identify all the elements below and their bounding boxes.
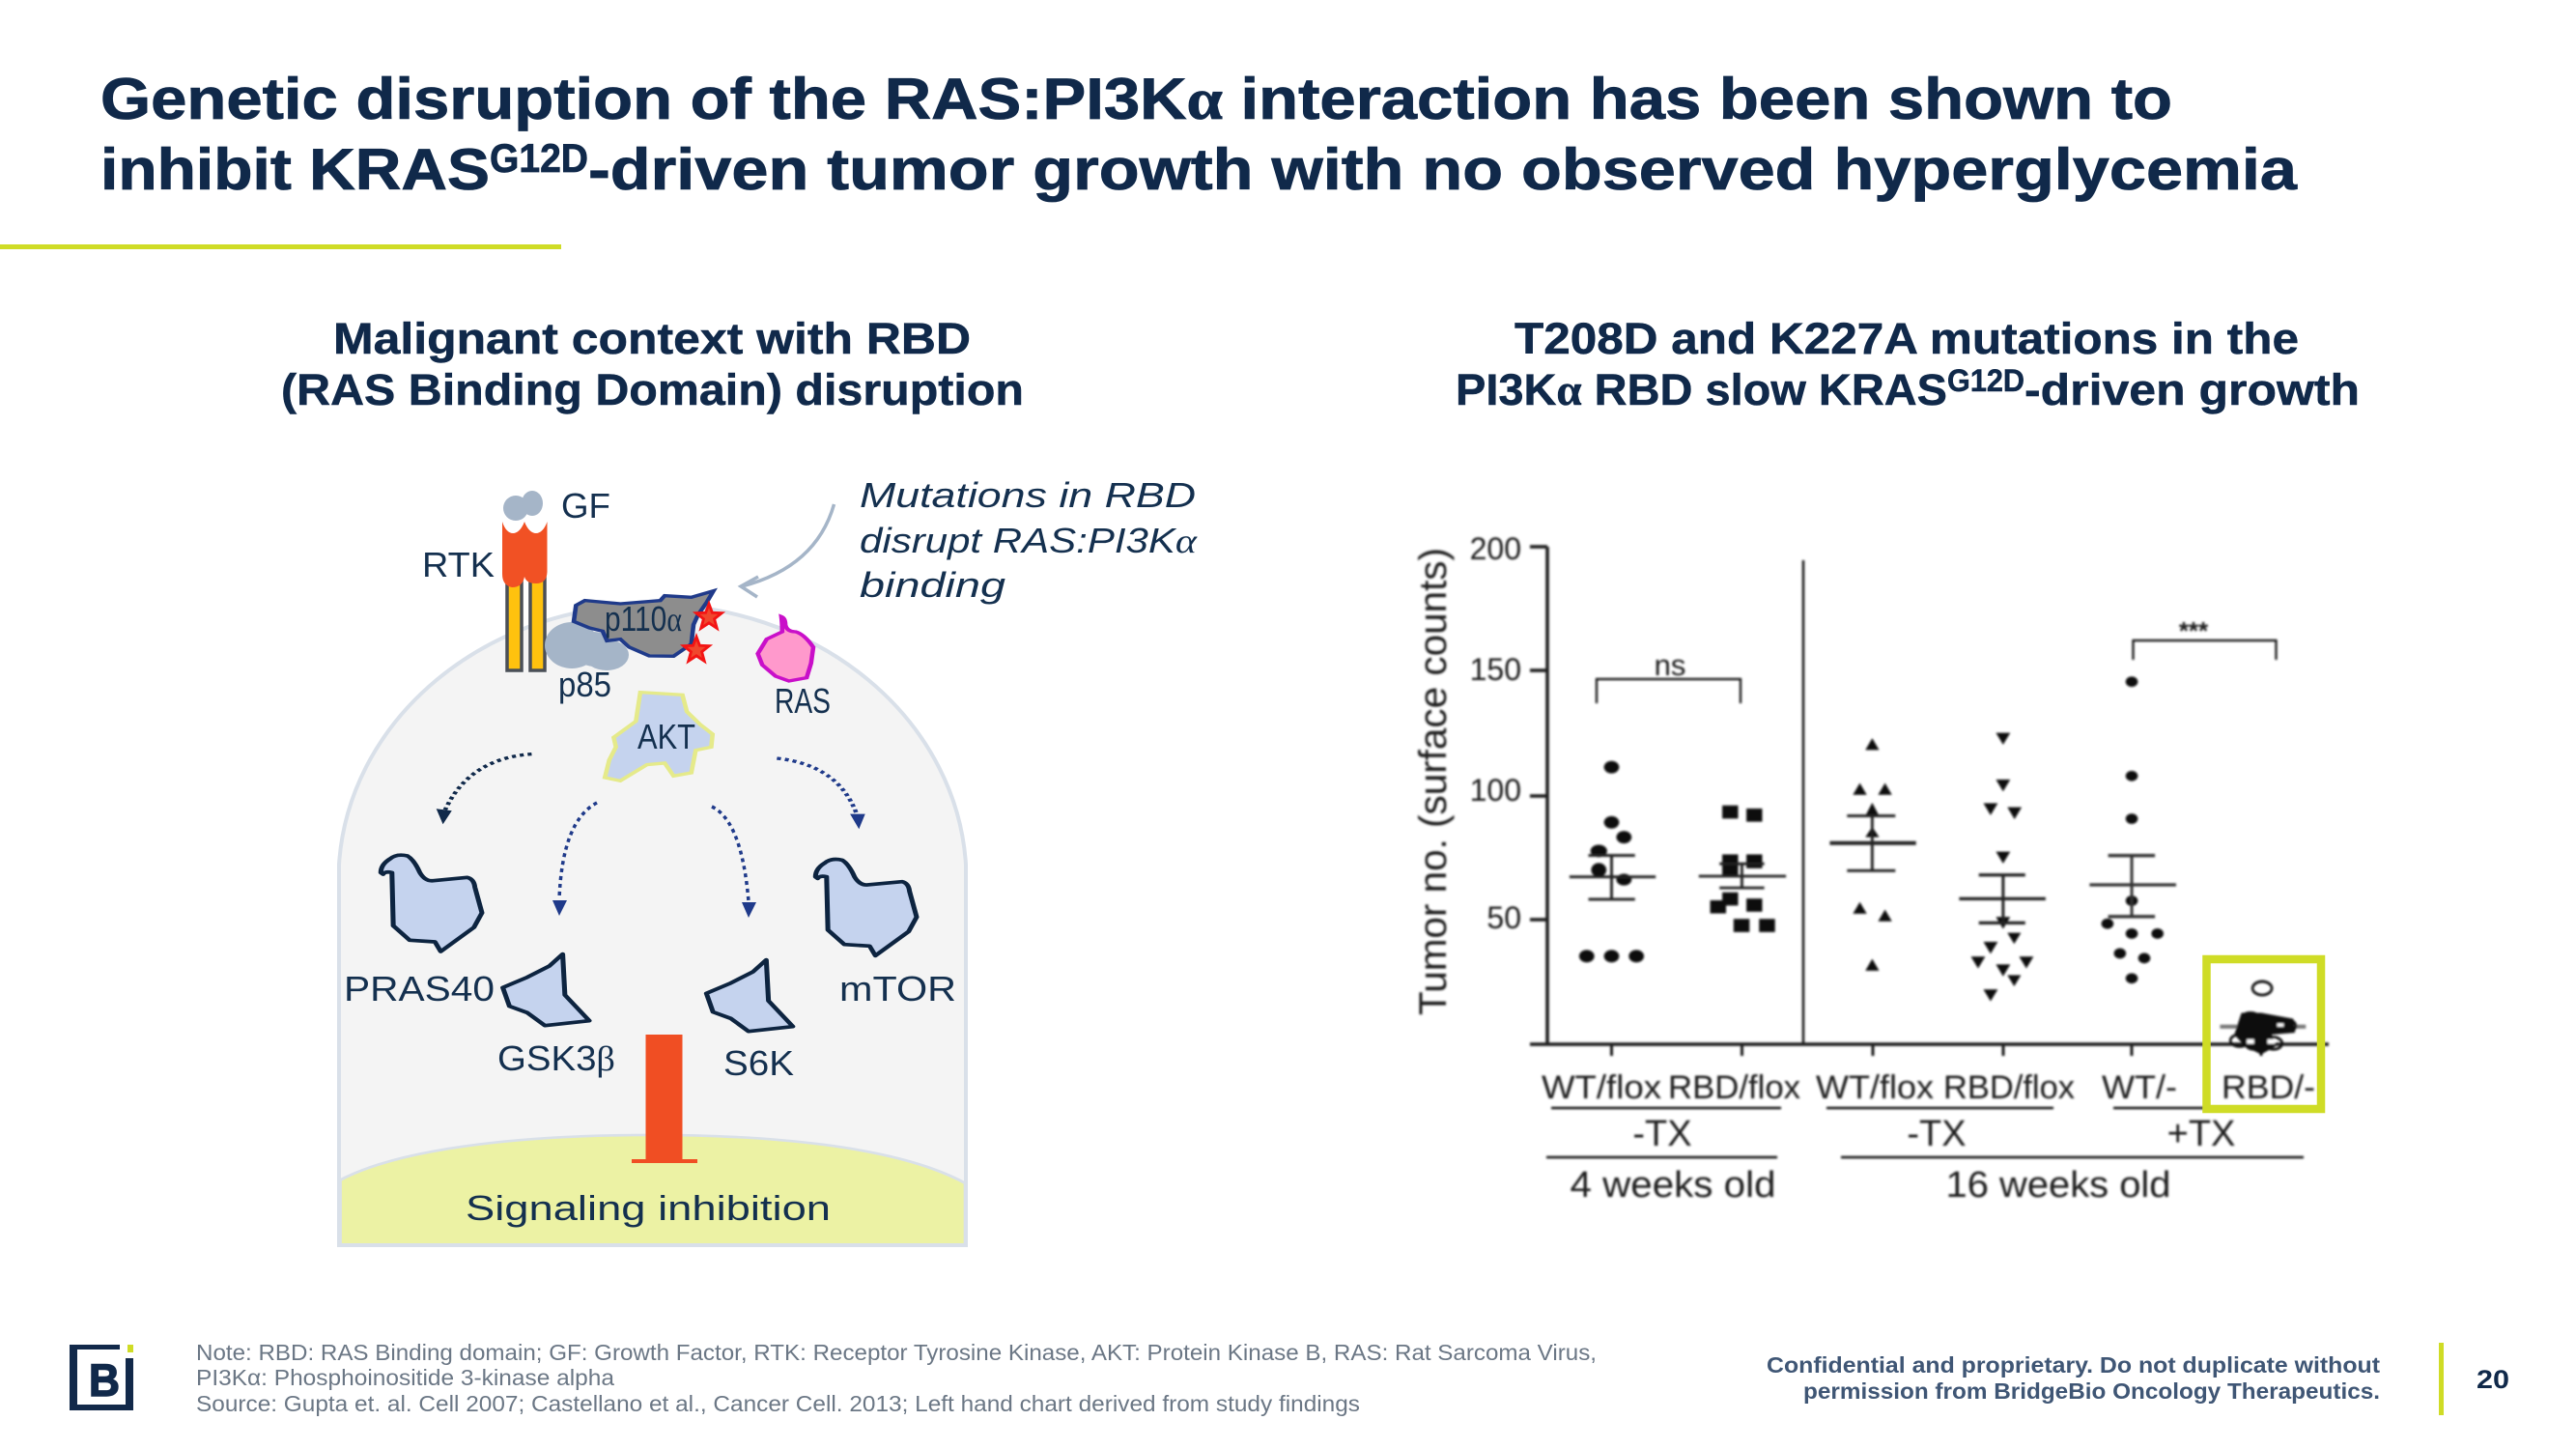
footer logo xyxy=(70,1345,133,1410)
y axis tick labels: 50 xyxy=(1486,900,1521,935)
diagram labels: Signaling inhibition xyxy=(466,1188,831,1228)
x axis treatment and age labels: 16 weeks old xyxy=(1945,1165,2171,1206)
title: Genetic disruption of the RAS:PI3K α interaction has been shown to xyxy=(100,67,2172,131)
x axis treatment and age labels xyxy=(1571,1114,2235,1206)
y axis title: Tumor no. (surface counts) xyxy=(1412,548,1455,1015)
footnote: PI3Kα: Phosphoinositide 3-kinase alpha xyxy=(196,1365,614,1390)
footer logo: B xyxy=(89,1354,120,1406)
diagram labels: GF xyxy=(561,486,610,526)
footnote: Source: Gupta et. al. Cell 2007; Castellano et al., Cancer Cell. 2013; Left hand chart derived from study findings xyxy=(196,1391,1360,1416)
icon: receptor tyrosine kinase xyxy=(502,522,547,670)
diagram labels xyxy=(344,486,956,1228)
icon: PRAS40 xyxy=(381,855,482,952)
icon: growth factor xyxy=(503,491,543,521)
x axis treatment and age labels: 4 weeks old xyxy=(1571,1165,1775,1206)
icon: p85 xyxy=(545,622,629,670)
icon: S6K xyxy=(706,960,793,1032)
highlight box: RBD/- xyxy=(2206,959,2321,1109)
diagram labels: PRAS40 xyxy=(344,969,495,1009)
bracket: significance: *** xyxy=(2179,616,2209,645)
heading: left panel xyxy=(281,314,1024,414)
footnote xyxy=(196,1340,1597,1416)
bracket: ns xyxy=(1597,648,1741,703)
bracket: significance xyxy=(2133,616,2276,660)
icon: p110 alpha xyxy=(574,591,714,656)
heading: right panel: G12D xyxy=(1947,363,2024,398)
heading: right panel: T208D and K227A mutations in the xyxy=(1514,314,2299,363)
title: inhibit KRAS xyxy=(100,137,490,202)
x axis group labels: WT/flox xyxy=(1816,1069,1934,1106)
footnote: Note: RBD: RAS Binding domain; GF: Growth Factor, RTK: Receptor Tyrosine Kinase, AKT: Protein Kinase B, RAS: Rat Sarcoma Virus, xyxy=(196,1340,1597,1365)
x axis group labels: RBD/- xyxy=(2222,1069,2315,1106)
inhibition bar xyxy=(632,1035,697,1163)
callout: mutations in RBD: Mutations in RBD xyxy=(860,475,1196,515)
data: RBD/- 16 weeks xyxy=(2220,981,2306,1055)
confidentiality notice: permission from BridgeBio Oncology Therapeutics. xyxy=(1803,1378,2380,1404)
icon: mutation star 1 xyxy=(693,600,725,632)
arrow: to p110 xyxy=(741,504,835,597)
data: RBD/flox 16 weeks xyxy=(1959,733,2046,1002)
chart: tumor number scatter plot xyxy=(1412,531,2329,1206)
x axis group labels: RBD/flox xyxy=(1943,1069,2075,1106)
heading: right panel: PI3Kα RBD slow KRAS xyxy=(1456,365,1947,414)
y axis tick labels: 200 xyxy=(1470,531,1521,566)
x axis treatment and age labels: -TX xyxy=(1632,1114,1692,1154)
x axis treatment and age labels: -TX xyxy=(1907,1114,1967,1154)
title xyxy=(100,67,2298,202)
confidentiality notice: Confidential and proprietary. Do not duplicate without xyxy=(1767,1352,2380,1378)
heading: left panel: (RAS Binding Domain) disruption xyxy=(281,365,1024,414)
y axis tick labels: 100 xyxy=(1470,773,1521,808)
callout: mutations in RBD: disrupt RAS:PI3K α xyxy=(860,521,1198,560)
x axis group rules xyxy=(1546,1108,2304,1157)
title: -driven tumor growth with no observed hyperglycemia xyxy=(588,137,2298,202)
data: WT/- 16 weeks xyxy=(2089,676,2176,983)
arrow: AKT to GSK3 beta xyxy=(552,803,597,916)
y axis tick labels xyxy=(1470,531,1521,935)
diagram labels: p85 xyxy=(558,665,611,704)
icon: mutation star 2 xyxy=(680,633,713,665)
x axis group labels: RBD/flox xyxy=(1668,1069,1800,1106)
diagram labels: RAS xyxy=(775,681,831,721)
diagram labels: GSK3β xyxy=(497,1038,615,1078)
callout: mutations in RBD: binding xyxy=(860,565,1005,605)
arrow: AKT to S6K xyxy=(712,807,756,918)
icon: mTOR xyxy=(815,860,917,955)
x axis group labels: WT/- xyxy=(2102,1069,2177,1106)
confidentiality notice xyxy=(1767,1352,2380,1404)
title: G12D xyxy=(490,135,588,181)
heading: right panel: -driven growth xyxy=(2024,365,2360,414)
axes xyxy=(1530,547,2329,1056)
icon: AKT xyxy=(605,693,713,781)
x axis group labels xyxy=(1542,1069,2315,1106)
icon: GSK3 beta xyxy=(503,954,589,1026)
heading: right panel xyxy=(1456,314,2360,414)
arrow: AKT to mTOR xyxy=(777,758,865,829)
icon: RAS xyxy=(758,616,813,681)
signaling inhibition base xyxy=(340,1135,966,1244)
panel: signaling diagram xyxy=(339,486,966,1245)
diagram labels: RTK xyxy=(422,545,495,584)
x axis treatment and age labels: +TX xyxy=(2167,1114,2235,1154)
bracket: ns: ns xyxy=(1655,648,1685,682)
callout: mutations in RBD xyxy=(860,475,1198,605)
data: WT/flox 16 weeks xyxy=(1829,738,1916,971)
data: WT/flox 4 weeks xyxy=(1570,761,1656,962)
cell dome xyxy=(339,605,966,1245)
data: RBD/flox 4 weeks xyxy=(1699,806,1786,932)
diagram labels: AKT xyxy=(637,717,695,756)
page number: 20 xyxy=(2477,1365,2509,1394)
diagram labels: S6K xyxy=(723,1043,794,1083)
arrow: AKT to PRAS40 xyxy=(437,754,531,824)
x axis group labels: WT/flox xyxy=(1542,1069,1661,1106)
y axis tick labels: 150 xyxy=(1470,652,1521,687)
label: p110 alpha: p110α xyxy=(605,599,682,639)
heading: left panel: Malignant context with RBD xyxy=(333,314,971,363)
diagram labels: mTOR xyxy=(839,969,956,1009)
